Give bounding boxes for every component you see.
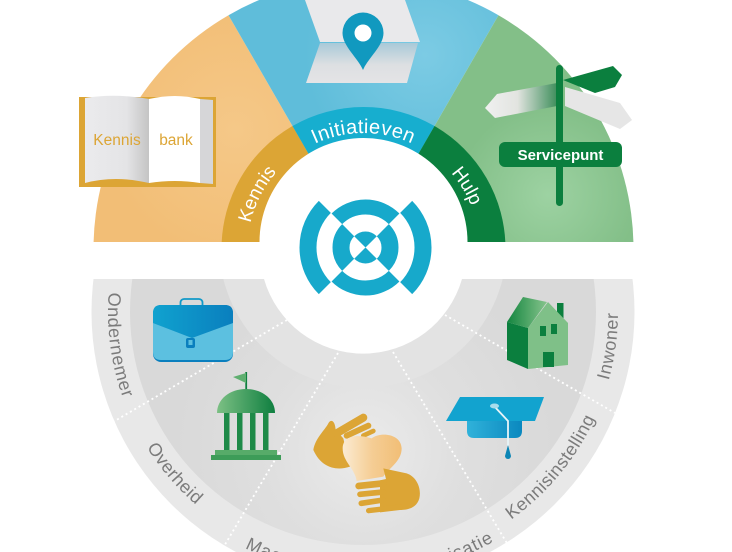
lower hand	[359, 468, 420, 512]
label: Kennis: Kennis	[238, 167, 276, 222]
central white circle bottom	[264, 279, 462, 354]
wedge: initiatieven background	[228, 0, 498, 154]
icon: open book: Kennis	[93, 132, 141, 149]
upper hand	[313, 418, 373, 468]
outer label ring	[92, 279, 634, 552]
icon: map with pin	[305, 0, 420, 83]
icon: signpost with Servicepunt	[485, 65, 632, 206]
central white circle top	[260, 138, 468, 242]
icon: house	[507, 297, 568, 369]
icon: open book: bank	[159, 132, 193, 149]
band segment: hulp	[418, 126, 506, 242]
icon: graduation cap	[446, 397, 544, 459]
inner lighter ring	[224, 279, 502, 336]
label: Hulp: Hulp	[452, 166, 480, 204]
heart-shaped bulb	[343, 435, 402, 481]
label: Kennisinstelling: Kennisinstelling	[505, 416, 596, 519]
icon: central logo	[308, 207, 423, 288]
label: Inwoner: Inwoner	[597, 313, 618, 379]
icon: hands with heart-shaped bulb	[313, 418, 420, 512]
label: Initiatieven: Initiatieven	[311, 118, 414, 143]
icon: briefcase	[153, 299, 233, 362]
label: Ondernemer: Ondernemer	[108, 294, 132, 396]
label: Overheid: Overheid	[149, 443, 204, 504]
icon: government building	[211, 372, 281, 460]
inner icon ring	[130, 279, 596, 545]
icon: open book	[79, 96, 216, 187]
icon: signpost with Servicepunt: Servicepunt	[518, 147, 603, 164]
band segment: initiatieven	[292, 107, 434, 154]
wedge: kennis background	[94, 15, 308, 242]
band segment: kennis	[222, 126, 308, 242]
wedge: hulp background	[418, 15, 634, 242]
dotted dividers	[113, 315, 615, 548]
panel: top half wheel	[94, 0, 634, 249]
panel: bottom half wheel	[92, 279, 634, 552]
